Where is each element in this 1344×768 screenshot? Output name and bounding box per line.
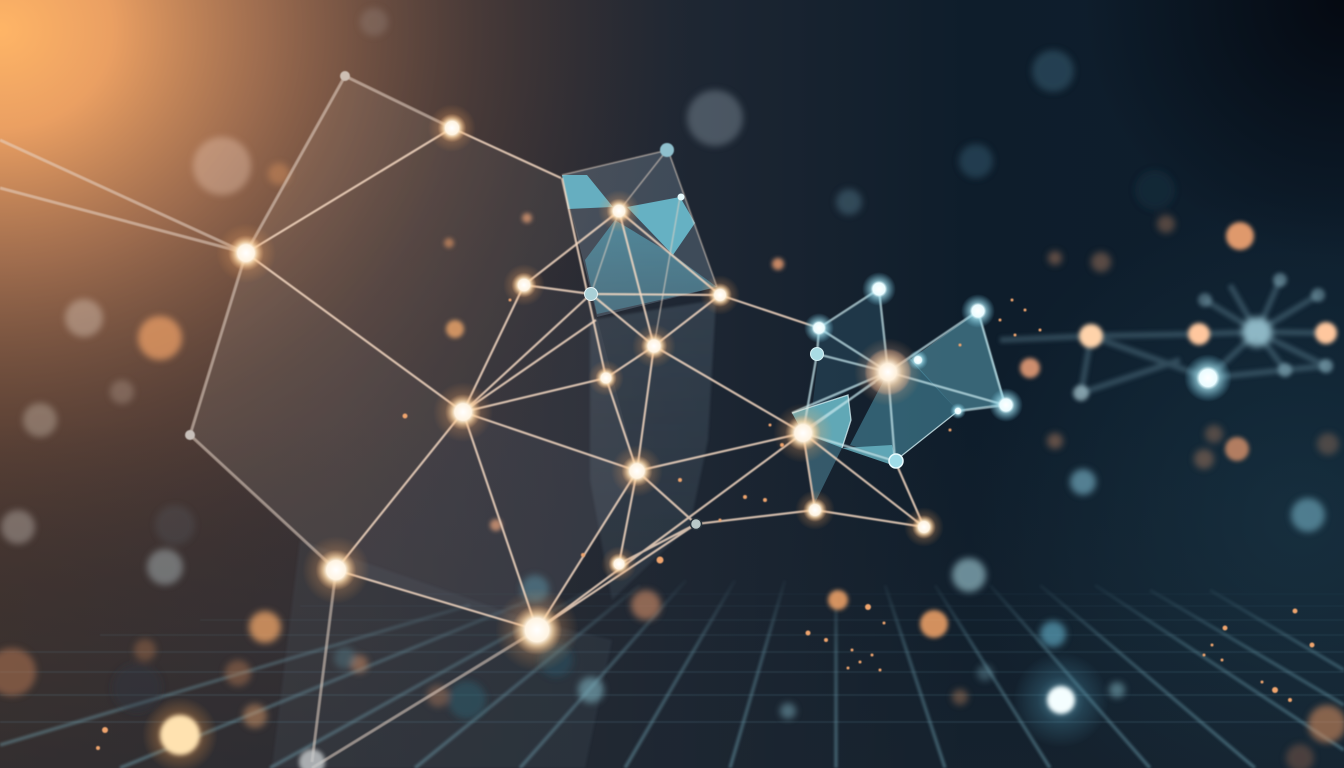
network edges, pale <box>0 76 537 768</box>
large polygon panels <box>190 76 717 630</box>
faint network nodes, right <box>1073 273 1337 402</box>
network edges, cool cluster <box>792 289 1005 461</box>
perspective grid floor <box>0 580 1344 768</box>
thin outline, right polygon <box>792 395 958 461</box>
translucent column panels <box>272 300 716 768</box>
faint background network, right <box>1000 280 1326 393</box>
sharper warm bokeh <box>444 213 1254 638</box>
foreground glowing lights <box>142 652 1109 768</box>
teal shards <box>562 175 1006 503</box>
sparkle particles <box>96 298 1314 750</box>
network edges, fine <box>562 150 717 346</box>
nodes <box>185 71 1023 768</box>
network edges, bright <box>246 128 924 630</box>
